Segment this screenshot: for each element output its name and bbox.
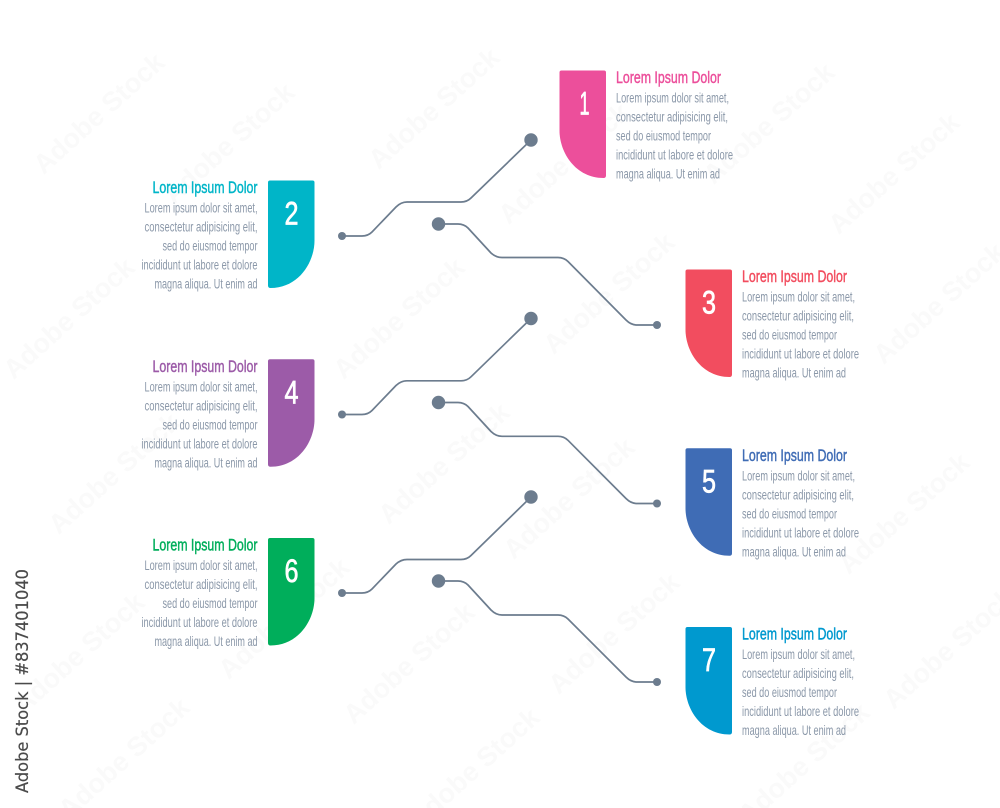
text block: step 4: consectetur adipisicing elit, (144, 397, 258, 413)
text block: step 5 (742, 467, 859, 559)
text: Adobe Stock (493, 96, 636, 230)
text: Adobe Stock (373, 396, 516, 530)
text block: step 2 (142, 200, 258, 292)
text block: step 4: magna aliqua. Ut enim ad (154, 454, 258, 470)
connector: step 6 (338, 490, 538, 597)
badge: step 1 (560, 70, 606, 178)
text block: step 4: Lorem ipsum dolor sit amet, (144, 378, 258, 394)
badge: step 6 (268, 538, 314, 646)
number 2: 2 (284, 196, 298, 232)
connector: step 3 (432, 217, 661, 329)
heading: step 2: Lorem Ipsum Dolor (152, 178, 258, 197)
text block: step 5: magna aliqua. Ut enim ad (742, 543, 846, 559)
text block: step 6: incididunt ut labore et dolore (142, 614, 258, 630)
text block: step 2: Lorem ipsum dolor sit amet, (144, 200, 258, 216)
text block: step 7 (742, 646, 859, 738)
badge: step 3 (686, 270, 732, 377)
text: Adobe Stock (698, 56, 841, 190)
heading: step 3: Lorem Ipsum Dolor (742, 267, 847, 286)
panel: step 1 (560, 68, 733, 182)
text: Adobe Stock (8, 586, 151, 720)
number 3: 3 (702, 284, 716, 320)
number 7: 7 (702, 642, 716, 678)
text: Adobe Stock (363, 41, 506, 175)
text block: step 6: sed do eiusmod tempor (162, 595, 258, 611)
text block: step 4 (142, 378, 258, 470)
text: Adobe Stock (28, 46, 171, 180)
text block: step 4: sed do eiusmod tempor (162, 416, 258, 432)
text block: step 1 (616, 90, 733, 182)
text: Adobe Stock (538, 226, 681, 360)
text block: step 6 (142, 557, 258, 649)
connector: step 7 (432, 574, 661, 686)
text: Adobe Stock (328, 251, 471, 385)
number 6: 6 (284, 553, 298, 589)
text block: step 7: Lorem ipsum dolor sit amet, (742, 646, 855, 662)
text: Adobe Stock (498, 431, 641, 565)
text block: step 5: sed do eiusmod tempor (742, 505, 837, 521)
text block: step 7: magna aliqua. Ut enim ad (742, 722, 846, 738)
connector: steps 1 and 2 (338, 133, 538, 240)
text block: step 7: sed do eiusmod tempor (742, 684, 837, 700)
text block: step 3 (742, 288, 859, 380)
badge: step 5 (686, 448, 732, 556)
panel: step 5 (686, 446, 859, 559)
panel: step 6 (142, 536, 314, 649)
text block: step 6: Lorem ipsum dolor sit amet, (144, 557, 258, 573)
panel: step 3 (686, 267, 859, 380)
heading: step 5: Lorem Ipsum Dolor (742, 446, 847, 465)
text block: step 2: magna aliqua. Ut enim ad (154, 276, 258, 292)
connector: step 4 (338, 312, 538, 418)
text: Adobe Stock (823, 106, 966, 240)
text block: step 7: consectetur adipisicing elit, (742, 665, 854, 681)
text: Adobe Stock (833, 446, 976, 580)
text block: step 1: magna aliqua. Ut enim ad (616, 166, 720, 182)
text block: step 2: incididunt ut labore et dolore (142, 256, 258, 272)
text block: step 5: consectetur adipisicing elit, (742, 486, 854, 502)
heading: step 4: Lorem Ipsum Dolor (152, 357, 258, 376)
text block: step 1: consectetur adipisicing elit, (616, 108, 728, 124)
text block: step 3: sed do eiusmod tempor (742, 326, 837, 342)
text block: step 6: consectetur adipisicing elit, (144, 576, 258, 592)
text block: step 1: incididunt ut labore et dolore (616, 146, 733, 162)
text block: step 3: incididunt ut labore et dolore (742, 346, 859, 362)
text block: step 2: sed do eiusmod tempor (162, 238, 258, 254)
text block: step 4: incididunt ut labore et dolore (142, 435, 258, 451)
text block: step 3: Lorem ipsum dolor sit amet, (742, 288, 855, 304)
heading: step 6: Lorem Ipsum Dolor (152, 536, 258, 554)
text block: step 6: magna aliqua. Ut enim ad (154, 633, 258, 649)
badge: step 2 (268, 180, 314, 288)
text block: step 3: magna aliqua. Ut enim ad (742, 364, 846, 380)
text block: step 3: consectetur adipisicing elit, (742, 308, 854, 324)
heading: step 1: Lorem Ipsum Dolor (616, 68, 721, 87)
panel: step 7 (686, 624, 859, 738)
badge: step 4 (268, 359, 314, 467)
text: Adobe Stock (213, 551, 356, 685)
text: Adobe Stock (158, 76, 301, 210)
badge: step 7 (686, 627, 732, 734)
connector: step 5 (432, 396, 661, 508)
text block: step 2: consectetur adipisicing elit, (144, 218, 258, 234)
number 5: 5 (702, 463, 716, 499)
text block: step 5: Lorem ipsum dolor sit amet, (742, 467, 855, 483)
text: Adobe Stock (338, 596, 481, 730)
heading: step 7: Lorem Ipsum Dolor (742, 624, 847, 644)
panel: step 4 (142, 357, 314, 470)
text block: step 5: incididunt ut labore et dolore (742, 524, 859, 540)
text block: step 7: incididunt ut labore et dolore (742, 703, 859, 719)
panel: step 2 (142, 178, 314, 292)
stock image credit: Adobe Stock | #837401040 (13, 569, 33, 793)
text: Adobe Stock (0, 251, 141, 385)
number 1: 1 (580, 86, 590, 122)
text block: step 1: sed do eiusmod tempor (616, 128, 711, 144)
number 4: 4 (284, 374, 298, 410)
text: Adobe Stock (543, 566, 686, 700)
text: Adobe Stock (43, 406, 186, 540)
text block: step 1: Lorem ipsum dolor sit amet, (616, 90, 729, 106)
